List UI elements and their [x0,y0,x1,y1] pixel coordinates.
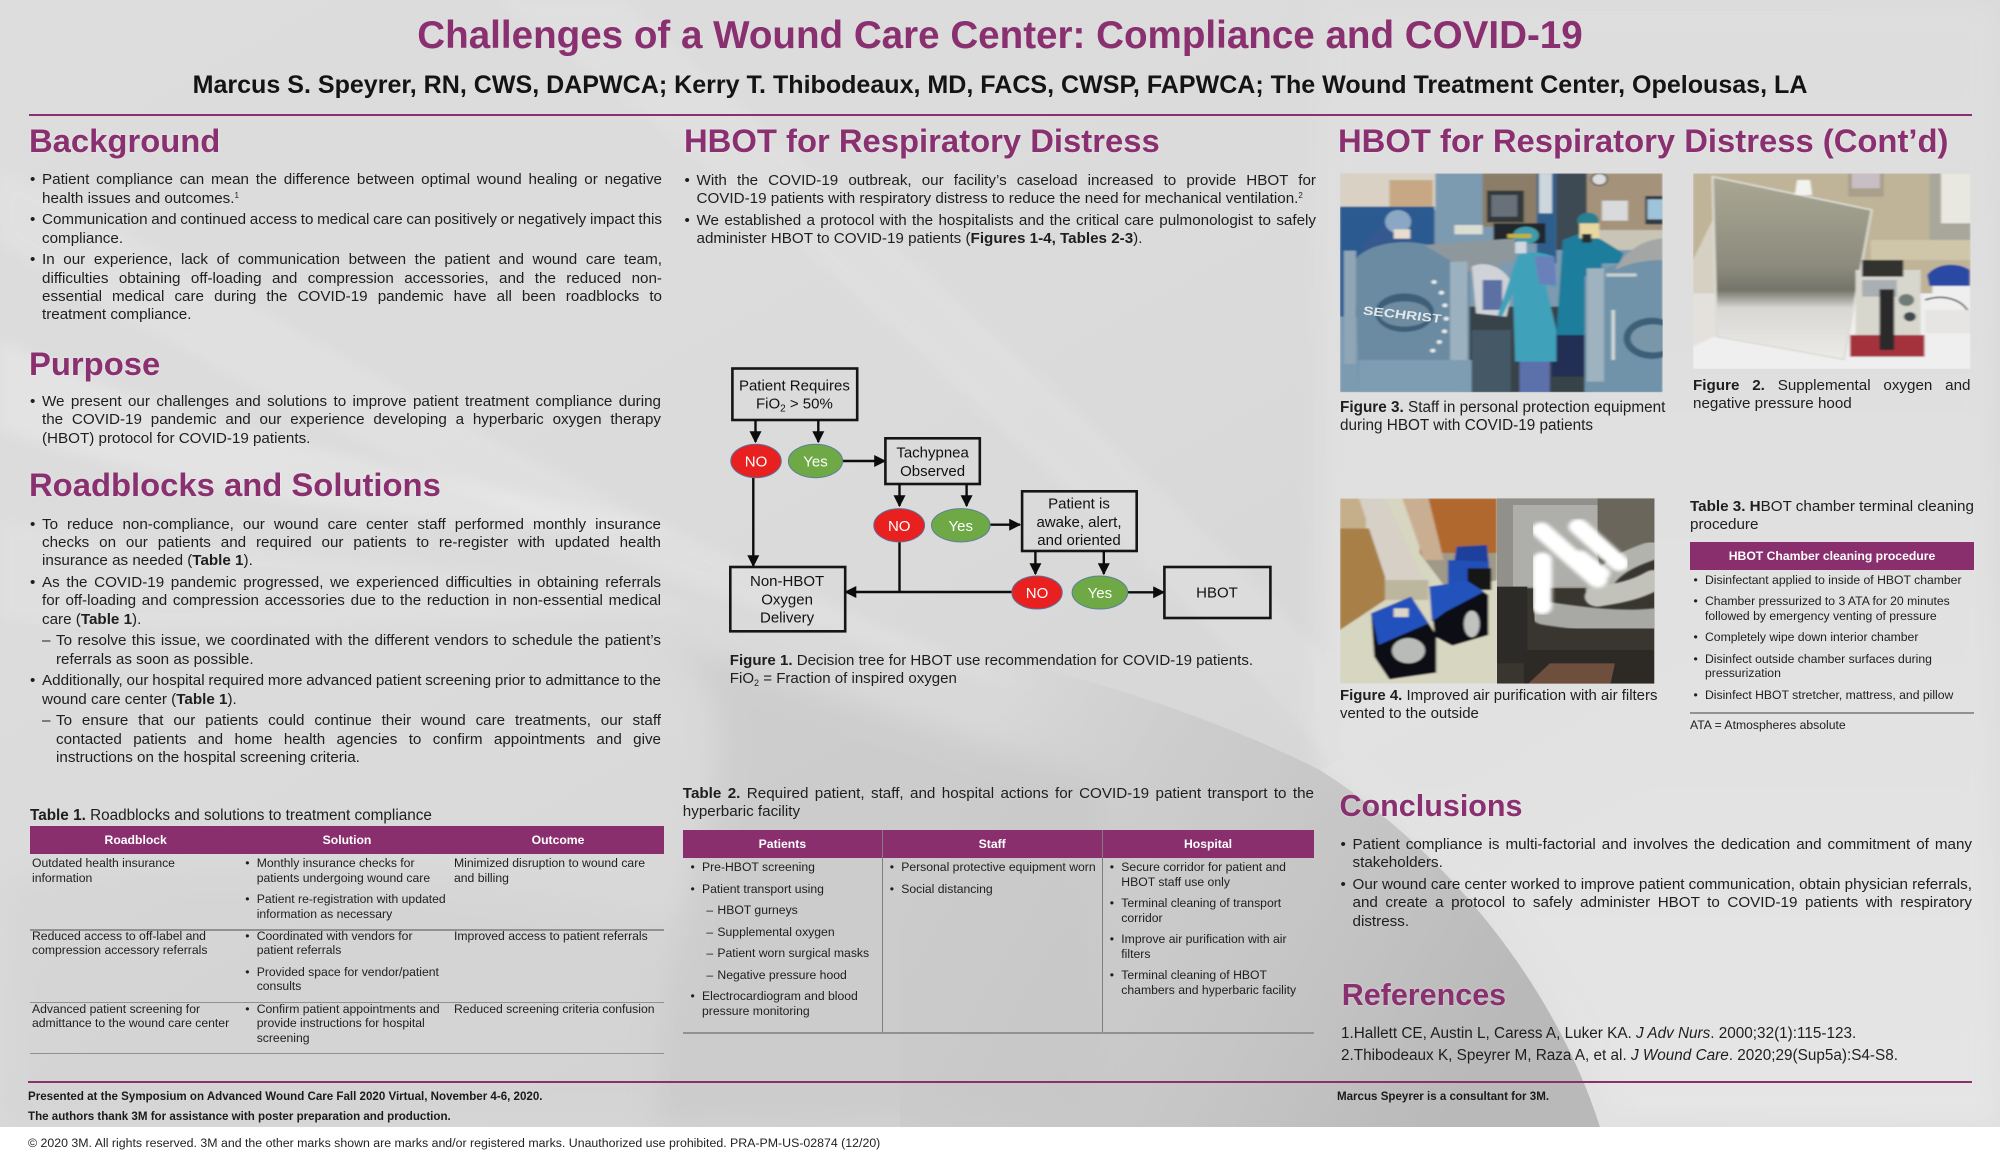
text block: roadblocks bullets: instructions on the hospital screening criteria. [56,749,360,766]
patients column: HBOT gurneys [717,903,798,917]
text block: roadblocks bullets: checks on our patients and required our patients to re-register with updated health [42,534,661,551]
figure 4 caption: vented to the outside [1340,705,1479,722]
arrows from first box [753,420,885,566]
table 1: compression accessory referrals [32,943,207,957]
staff right [1556,232,1624,335]
staff left [1363,227,1413,250]
text block: background bullets: compliance. [42,230,123,247]
text block: conclusions bullets: Patient compliance is multi-factorial and involves the dedication and commitment of many [1352,836,1972,853]
table 3 header: HBOT Chamber cleaning procedure [1729,549,1935,563]
hospital column: filters [1121,947,1150,961]
heading: Roadblocks and Solutions: Roadblocks and Solutions [29,466,441,503]
box: patient requires FiO2: > 50% [786,396,833,412]
photos [1340,173,1970,684]
text block: HBOT bullets: COVID-19 patients with respiratory distress to reduce the need for mechanical ventilation.2 [696,190,1303,207]
text block: roadblocks bullets: – [42,632,50,649]
hospital column: chambers and hyperbaric facility [1121,983,1296,997]
figure 4 caption [1340,687,1657,722]
table 1 [30,826,664,1054]
footer: disclosure: Marcus Speyrer is a consultant for 3M. [1337,1090,1549,1102]
table 3: Disinfectant applied to inside of HBOT chamber [1705,572,1962,586]
box: tachypnea observed: Observed [900,463,965,480]
footer: presented at: Presented at the Symposium on Advanced Wound Care Fall 2020 Virtual, November 4-6, 2020. [28,1090,542,1102]
patients column: pressure monitoring [702,1004,810,1018]
table 1: patient referrals [257,943,341,957]
box: patient awake alert oriented: and oriented [1037,532,1121,549]
text block: roadblocks bullets: insurance as needed (Table 1). [42,552,253,569]
table 1: information [32,871,92,885]
table 3: ATA = Atmospheres absolute [1690,718,1846,732]
patients column: Supplemental oxygen [717,924,835,938]
patients column: Electrocardiogram and blood [702,989,858,1003]
table 3: • [1694,630,1698,644]
text block: conclusions bullets: • [1340,876,1346,893]
box: patient requires FiO2: Patient Requires [739,378,850,394]
figure 4 right photo: vented hoses [1497,498,1654,684]
text block: conclusions bullets: stakeholders. [1352,854,1443,871]
box: HBOT: HBOT [1196,584,1238,602]
table 1: patients undergoing wound care [257,871,430,885]
Yes oval 1 [788,444,843,478]
box: patient awake alert oriented: Patient is [1048,496,1110,512]
table 1: consults [257,979,301,993]
figure 3 photo: staff with hyperbaric chambers: SECHRIST [1362,303,1443,325]
box: non-HBOT oxygen delivery: Oxygen [761,592,813,609]
text block: roadblocks bullets: • [30,574,35,591]
box: tachypnea observed [885,438,980,484]
table 1: Minimized disruption to wound care [454,856,645,870]
table 3: Disinfect outside chamber surfaces during [1705,652,1932,666]
patients column: Patient worn surgical masks [717,946,869,960]
text block: background bullets: • [30,211,35,228]
text block: roadblocks bullets [30,516,661,766]
text block: roadblocks bullets: for off-loading and compression accessories due to the reduction in non-essential medical [42,592,661,609]
text block: background bullets [30,171,662,323]
table 2 header [683,830,1314,858]
table 1 header: Roadblock [105,833,167,847]
table 1: Reduced screening criteria confusion [454,1002,655,1016]
patients column: • [690,989,695,1003]
figure 2 caption [1693,377,1970,412]
text block: background bullets: • [30,251,35,268]
text block: roadblocks bullets: To ensure that our patients could continue their wound care treatments, our staff [56,712,661,729]
NO oval 1: NO [745,454,767,470]
text block: purpose bullet: the COVID-19 pandemic and our experience developing a hyperbaric oxygen therapy [42,411,661,428]
table 1: screening [257,1031,310,1045]
box: patient requires FiO2: FiO [756,396,780,412]
hospital column: • [1110,896,1114,910]
text block: HBOT bullets: • [684,172,690,188]
text block: roadblocks bullets: To resolve this issue, we coordinated with the different vendors to schedule the patient’s [56,632,661,649]
Yes oval 2 [932,509,990,542]
staff centre [1520,360,1550,392]
table 1 header [30,826,664,854]
title: Challenges of a Wound Care Center: Compliance and COVID-19 [417,14,1583,57]
text block: conclusions bullets: • [1340,836,1346,853]
table 1: Coordinated with vendors for [257,928,413,942]
table 3: Disinfect HBOT stretcher, mattress, and pillow [1705,688,1953,702]
figure 4 left photo: air filter units [1340,498,1497,684]
text block: roadblocks bullets: To reduce non-compliance, our wound care center staff performed monthly insurance [42,516,661,532]
table 1 caption: Table 1. Roadblocks and solutions to treatment compliance [30,806,432,824]
text block: references: 2.Thibodeaux K, Speyrer M, Raza A, et al. J Wound Care. 2020;29(Sup5a):S4-S8. [1341,1047,1898,1064]
hospital column: corridor [1121,911,1163,925]
figure 3 caption: during HBOT with COVID-19 patients [1340,417,1593,434]
text block: purpose bullet [30,393,661,447]
patients column: Pre-HBOT screening [702,860,815,874]
box: non-HBOT oxygen delivery [730,567,845,631]
footer: acknowledgement: The authors thank 3M for assistance with poster preparation and production. [28,1111,451,1123]
Yes oval 2: Yes [949,518,973,535]
table 3 [1690,542,1974,732]
NO oval 1 [731,444,781,478]
patients column: – [706,946,713,960]
text block: background bullets: difficulties obtaining off-loading and compression accessories, and the reduced non- [42,270,662,287]
table 3: • [1694,594,1698,608]
table 1 header: Outcome [532,833,584,847]
text block: background bullets: health issues and outcomes.1 [42,190,239,207]
patients column: – [706,924,713,938]
patients column: Negative pressure hood [717,968,847,982]
arrows from second box [900,484,1020,592]
text block: references: 1.Hallett CE, Austin L, Caress A, Luker KA. J Adv Nurs. 2000;32(1):115-123. [1341,1025,1856,1042]
text block: HBOT bullets [684,172,1316,247]
text block: conclusions bullets: and create a protocol to safely administer HBOT to COVID-19 patients with respiratory [1352,894,1972,911]
text block: background bullets: treatment compliance. [42,306,191,323]
hospital column: • [1110,968,1114,982]
table 1: • [245,892,249,906]
staff column: • [890,860,894,874]
hospital column: • [1110,932,1114,946]
table 1: information as necessary [257,907,392,921]
text block: roadblocks bullets: wound care center (Table 1). [42,691,237,708]
text block: purpose bullet: (HBOT) protocol for COVID-19 patients. [42,430,310,447]
box: patient requires FiO2 [732,368,857,420]
text block: conclusions bullets [1340,836,1972,930]
table 2 header: Patients [759,837,806,851]
patients column: • [690,860,695,874]
text block: background bullets: essential medical care during the COVID-19 pandemic have all been roadblocks to [42,288,662,305]
table 2 header: Staff [979,837,1006,851]
table 1: Confirm patient appointments and [257,1002,440,1016]
table 3: pressurization [1705,666,1781,680]
heading: Purpose: Purpose [29,345,160,382]
table 2 caption: hyperbaric facility [683,803,800,820]
table 3 caption: procedure [1690,516,1758,533]
figure 2 caption: Figure 2. Supplemental oxygen and [1693,377,1970,394]
table 3: followed by emergency venting of pressure [1705,609,1937,623]
staff column: • [890,882,894,896]
text block: HBOT bullets: With the COVID-19 outbreak, our facility’s caseload increased to provide HBOT for [696,172,1316,188]
box: patient awake alert oriented [1022,491,1137,551]
table 3: • [1694,572,1698,586]
text block: references [1341,1025,1898,1064]
text block: roadblocks bullets: Additionally, our hospital required more advanced patient screening prior to admittance to the [42,672,661,689]
table 1: provide instructions for hospital [257,1016,425,1030]
text block: roadblocks bullets: • [30,672,35,689]
table 2 header: Hospital [1184,837,1232,851]
box: patient awake alert oriented: awake, alert, [1036,514,1122,531]
figure 1 decision tree [730,368,1270,631]
figure 3 caption [1340,399,1666,434]
heading: Conclusions: Conclusions [1340,789,1523,823]
figure 1 caption: FiO2 = Fraction of inspired oxygen [730,670,957,688]
table 1: Reduced access to off-label and [32,928,206,942]
text block: roadblocks bullets: – [42,712,50,729]
text block: HBOT bullets: • [684,212,690,229]
staff column: Personal protective equipment worn [901,860,1096,874]
patients column: Patient transport using [702,882,824,896]
box: non-HBOT oxygen delivery: Non-HBOT [750,573,824,590]
patients column: – [706,968,713,982]
Yes oval 1: Yes [803,454,828,470]
arrows from third box [846,551,1164,592]
hospital column: Terminal cleaning of transport [1121,896,1281,910]
text block: background bullets: Communication and continued access to medical care can positively or negatively impact this [42,211,662,228]
Yes oval 3: Yes [1088,585,1112,602]
table 3 header [1690,542,1974,570]
text block: background bullets: • [30,171,35,188]
table 1: Monthly insurance checks for [257,856,415,870]
table 1: • [245,856,249,870]
table 2 [683,830,1314,1034]
text block: HBOT bullets: We established a protocol with the hospitalists and the critical care pulmonologist to safely [696,212,1316,229]
patients column [690,860,869,1018]
table 1: Provided space for vendor/patient [257,965,439,979]
heading: References: References [1342,978,1506,1012]
text: • [30,393,35,410]
NO oval 2 [874,509,925,542]
hospital column: Secure corridor for patient and [1121,860,1286,874]
text block: roadblocks bullets: As the COVID-19 pandemic progressed, we experienced difficulties in obtaining referrals [42,574,661,591]
table 1: • [245,928,249,942]
staff column: Social distancing [901,882,993,896]
hospital column [1110,860,1296,997]
figure 3 photo: staff with hyperbaric chambers [1340,173,1680,392]
figure 4 caption: Figure 4. Improved air purification with air filters [1340,687,1657,704]
figure 3 caption: Figure 3. Staff in personal protection equipment [1340,399,1665,416]
table 1: Advanced patient screening for [32,1002,200,1016]
heading: HBOT for Respiratory Distress: HBOT for Respiratory Distress [684,122,1160,159]
chamber left [1356,242,1472,360]
table 2 caption: Table 2. Required patient, staff, and hospital actions for COVID-19 patient transport to the [683,785,1314,802]
table 1: and billing [454,871,509,885]
text block: purpose bullet: We present our challenges and solutions to improve patient treatment compliance during [42,393,661,410]
text block: HBOT bullets: administer HBOT to COVID-19 patients (Figures 1-4, Tables 2-3). [696,230,1142,247]
box: non-HBOT oxygen delivery: Delivery [760,610,815,627]
figure 1 caption: Figure 1. Decision tree for HBOT use recommendation for COVID-19 patients. [730,652,1253,669]
figure 2 photo: negative pressure hood [1693,173,1971,369]
staff column [890,860,1096,896]
heading: Background: Background [29,122,220,159]
chamber right [1585,260,1663,392]
figure 2 caption: negative pressure hood [1693,395,1852,412]
text block: roadblocks bullets: contacted patients and home health agencies to confirm appointments and give [56,731,661,748]
patients column: • [690,882,695,896]
table 1: Outdated health insurance [32,856,175,870]
hospital column: Terminal cleaning of HBOT [1121,968,1267,982]
table 3 caption: Table 3. HBOT chamber terminal cleaning [1690,498,1974,515]
text block: roadblocks bullets: care (Table 1). [42,611,141,628]
table 3: Completely wipe down interior chamber [1705,630,1918,644]
hospital column: Improve air purification with air [1121,932,1287,946]
text block: conclusions bullets: Our wound care center worked to improve patient communication, obtain physician referrals, [1352,876,1972,893]
box: patient requires FiO2: 2 [780,404,786,414]
text block: roadblocks bullets: referrals as soon as possible. [56,651,254,668]
text block: background bullets: In our experience, lack of communication between the patient and wound care team, [42,251,662,268]
hospital column: HBOT staff use only [1121,875,1230,889]
text block: conclusions bullets: distress. [1352,913,1409,930]
authors: Marcus S. Speyrer, RN, CWS, DAPWCA; Kerry T. Thibodeaux, MD, FACS, CWSP, FAPWCA; The Wound Treatment Center, Opelousas, LA [193,71,1807,99]
text block: roadblocks bullets: • [30,516,35,532]
patients column: – [706,903,713,917]
table 3 caption [1690,498,1974,533]
copyright line: © 2020 3M. All rights reserved. 3M and the other marks shown are marks and/or registered marks. Unauthorized use prohibited. PRA-PM-US-02874 (12/20) [28,1136,880,1150]
NO oval 2: NO [888,518,910,535]
NO oval 3 [1012,576,1062,609]
Yes oval 3 [1072,576,1128,609]
table 1: Improved access to patient referrals [454,928,648,942]
table 1: • [245,1002,249,1016]
table 1: Patient re-registration with updated [257,892,446,906]
text block: background bullets: Patient compliance can mean the difference between optimal wound healing or negative [42,171,662,188]
table 3: • [1694,688,1698,702]
box: HBOT [1164,567,1270,618]
table 1: admittance to the wound care center [32,1016,229,1030]
table 2 caption [682,785,1314,820]
table 3: • [1694,652,1698,666]
heading: HBOT for Respiratory Distress (Cont'd): HBOT for Respiratory Distress (Cont’d) [1338,122,1948,159]
table 3: Chamber pressurized to 3 ATA for 20 minutes [1705,594,1950,608]
hospital column: • [1110,860,1114,874]
figure 1 caption [730,652,1253,688]
NO oval 3: NO [1026,585,1048,602]
box: tachypnea observed: Tachypnea [896,444,970,462]
table 1 header: Solution [323,833,371,847]
table 1: • [245,965,249,979]
